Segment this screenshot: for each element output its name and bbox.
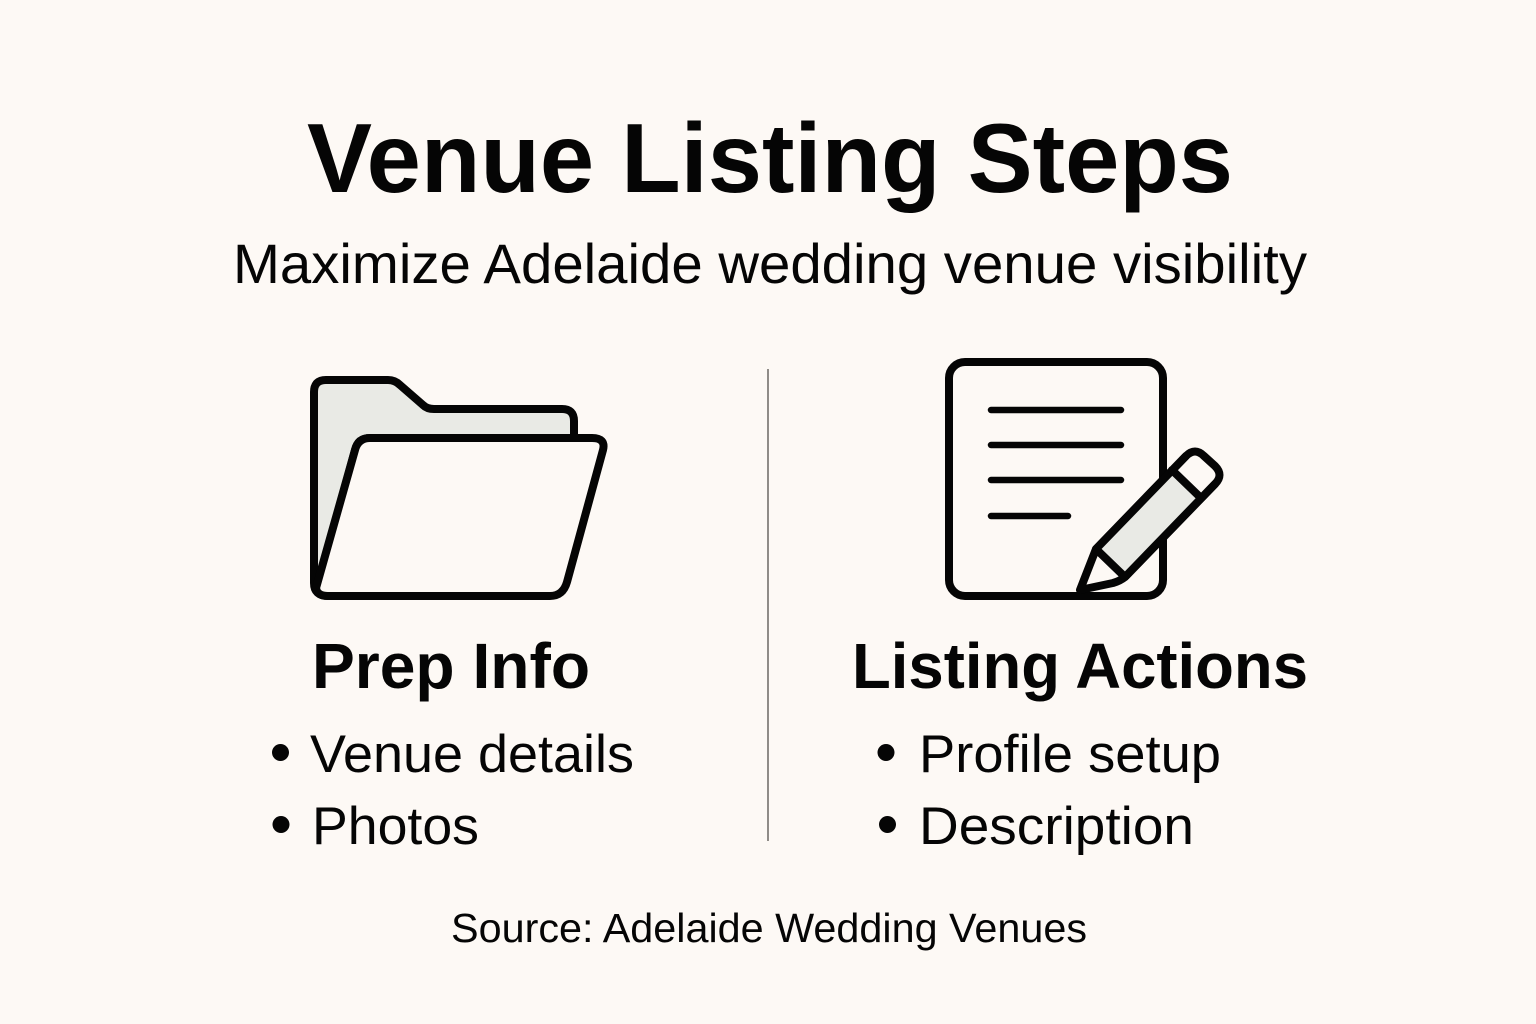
heading: Listing Actions: Listing Actions (852, 630, 1308, 702)
heading: Prep Info: Prep Info (312, 630, 590, 702)
list: Prep Info items: Photos (312, 797, 479, 856)
title: Venue Listing Steps (307, 103, 1233, 213)
list: Listing Actions items: Description (919, 797, 1194, 856)
pencil edges (1096, 456, 1215, 577)
subtitle: Maximize Adelaide wedding venue visibility (233, 232, 1307, 295)
pencil body (1096, 470, 1201, 577)
list: Listing Actions items: Profile setup (919, 725, 1221, 784)
list: Prep Info items (272, 725, 634, 856)
icon: folder (314, 380, 604, 596)
source note: Source: Adelaide Wedding Venues (451, 905, 1087, 951)
pencil outline (1080, 452, 1220, 590)
icon: document with pencil (949, 362, 1220, 596)
list: Prep Info items: Venue details (310, 725, 634, 784)
list: Listing Actions items (878, 725, 1221, 856)
divider (767, 369, 769, 841)
